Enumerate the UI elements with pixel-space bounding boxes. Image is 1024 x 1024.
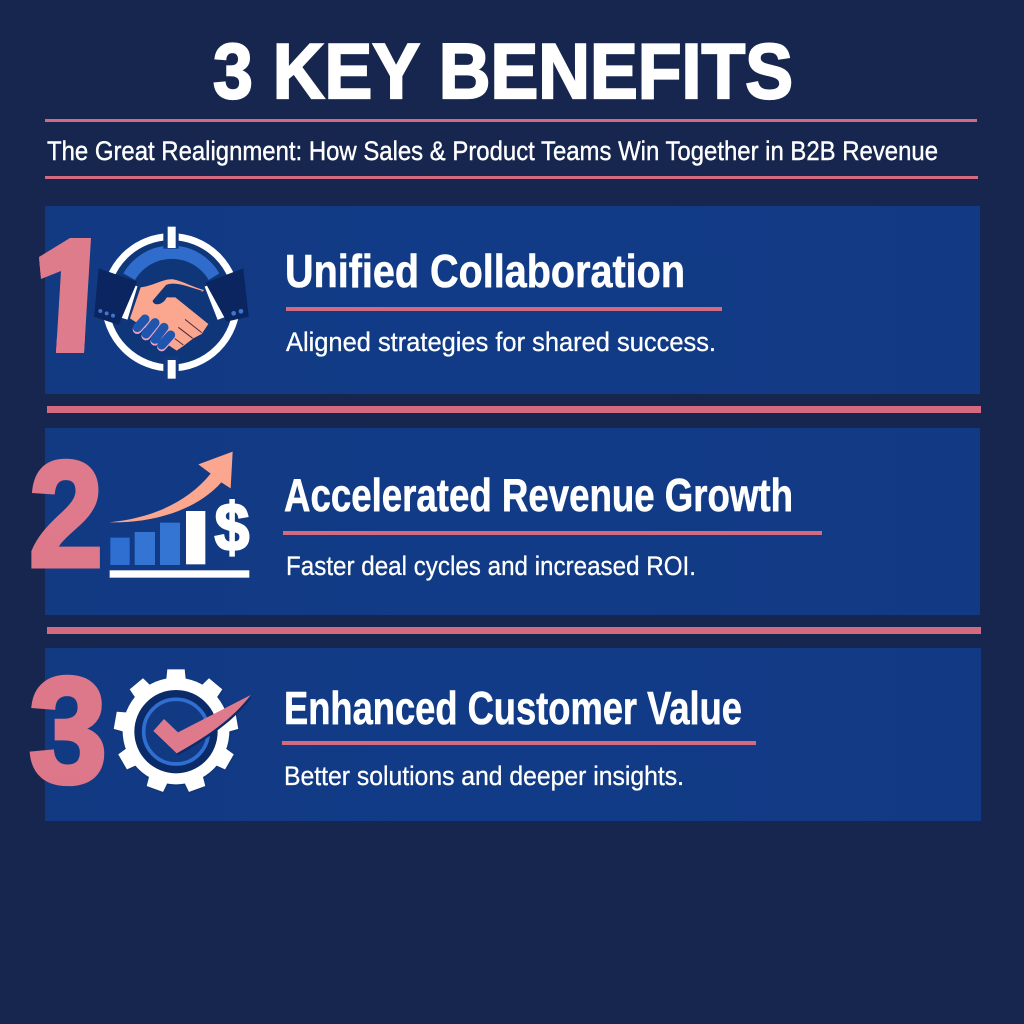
- heading: Unified Collaboration: [285, 245, 685, 297]
- icon: handshake in target ring: [94, 223, 249, 381]
- icon: gear with checkmark: [113, 669, 252, 793]
- number 3: 3: [29, 646, 107, 814]
- divider 1: [47, 406, 981, 413]
- title: 3 KEY BENEFITS: [213, 27, 793, 115]
- number 1: 1: [26, 208, 115, 387]
- heading: Accelerated Revenue Growth: [284, 469, 793, 521]
- description: Faster deal cycles and increased ROI.: [286, 551, 696, 581]
- panel: unified collaboration: [26, 206, 980, 394]
- description: Aligned strategies for shared success.: [286, 327, 716, 357]
- infographic canvas: [30, 42, 981, 821]
- number 2: 2: [29, 430, 103, 598]
- description: Better solutions and deeper insights.: [284, 761, 684, 791]
- subtitle band: [45, 119, 978, 179]
- icon: growth chart with dollar: [109, 452, 249, 578]
- divider 2: [47, 627, 981, 634]
- panel: accelerated revenue growth: [29, 428, 980, 615]
- subtitle: The Great Realignment: How Sales & Product Teams Win Together in B2B Revenue: [47, 136, 938, 166]
- dollar sign: $: [215, 489, 249, 565]
- panel: enhanced customer value: [29, 646, 981, 821]
- heading: Enhanced Customer Value: [284, 682, 742, 734]
